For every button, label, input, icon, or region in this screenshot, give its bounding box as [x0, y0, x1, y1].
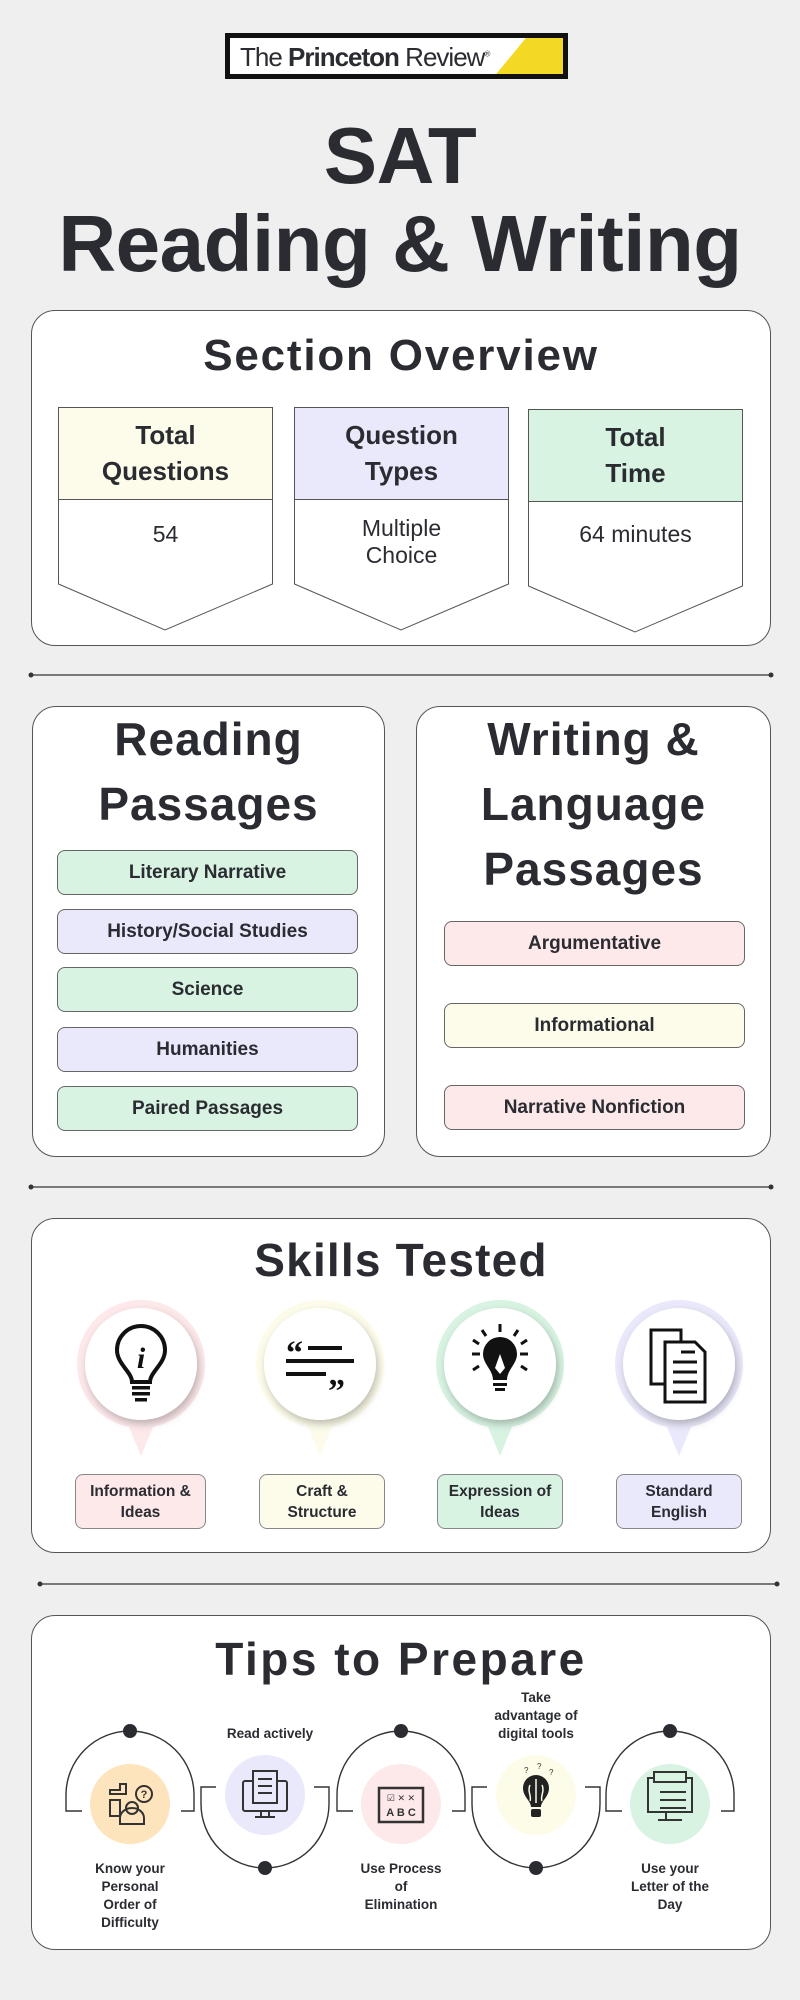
icon: abc board: A B C	[386, 1807, 416, 1819]
label: information & ideas	[75, 1474, 206, 1529]
heading: writing & language: Passages	[483, 843, 704, 895]
card: question types: Multiple	[362, 515, 441, 541]
icon: abc board	[361, 1764, 441, 1844]
icon: monitor document	[225, 1755, 305, 1835]
pill list: writing: Argumentative	[528, 932, 661, 954]
skill pins	[77, 1300, 743, 1456]
icon: brain bulb: ?	[549, 1768, 554, 1777]
tip label: personal order of difficulty: Difficulty	[101, 1915, 159, 1930]
pill list: reading	[57, 850, 358, 1131]
label: standard english: Standard	[645, 1482, 713, 1500]
icon: abc board: ☑ ✕ ✕	[387, 1793, 415, 1803]
card: total time	[528, 409, 743, 632]
label: standard english	[616, 1474, 742, 1529]
icon: brain bulb: ?	[524, 1766, 529, 1775]
icon: brain bulb: ?	[537, 1762, 542, 1771]
icon: puzzle person	[90, 1764, 170, 1844]
label: craft & structure: Craft &	[296, 1482, 348, 1500]
heading: writing & language: Writing &	[487, 713, 700, 765]
card: total questions: Questions	[102, 456, 229, 486]
heading: reading passages: Passages	[98, 778, 319, 830]
label: information & ideas: Information &	[90, 1482, 191, 1500]
pill list: reading: Science	[172, 978, 243, 1000]
heading: reading passages: Reading	[114, 713, 303, 765]
icon: letter of day monitor	[630, 1764, 710, 1844]
icon pin: information	[77, 1300, 205, 1456]
pill list: reading: History/Social Studies	[107, 920, 308, 942]
icon pin: standard english	[615, 1300, 743, 1456]
heading: section overview: Section Overview	[203, 331, 599, 380]
logo	[225, 33, 568, 79]
tip label: personal order of difficulty: Personal	[101, 1879, 159, 1894]
icon: brain bulb	[496, 1755, 576, 1835]
tip label: digital tools: digital tools	[498, 1726, 574, 1741]
tip label: process of elimination	[360, 1861, 442, 1912]
label: craft & structure	[259, 1474, 385, 1529]
label: standard english: English	[651, 1504, 707, 1520]
title: SAT	[324, 111, 476, 200]
title	[58, 111, 742, 288]
card: total time: 64 minutes	[579, 521, 692, 547]
tip label: process of elimination: of	[395, 1879, 407, 1894]
card: total questions: Total	[135, 420, 196, 450]
tip label: read actively: Read actively	[227, 1726, 313, 1741]
tip label: letter of the day: Letter of the	[631, 1879, 709, 1894]
icon pin: expression	[436, 1300, 564, 1456]
logo: The Princeton Review®	[240, 42, 489, 72]
tip label: personal order of difficulty: Know your	[95, 1861, 165, 1876]
card: total time: Total	[605, 422, 666, 452]
panel: tips to prepare	[31, 1615, 771, 1950]
tip label: personal order of difficulty	[95, 1861, 165, 1930]
pill list: writing: Narrative Nonfiction	[504, 1096, 685, 1118]
label: information & ideas: Ideas	[121, 1504, 160, 1520]
heading: reading passages	[98, 713, 319, 830]
panel: writing & language passages	[416, 706, 771, 1157]
tip label: process of elimination: Use Process	[360, 1861, 442, 1876]
label: craft & structure: Structure	[288, 1504, 356, 1520]
icon pin: craft	[256, 1300, 384, 1456]
heading: tips to prepare: Tips to Prepare	[215, 1633, 587, 1685]
label: expression of ideas: Ideas	[480, 1504, 520, 1520]
card: total questions: 54	[153, 521, 178, 547]
heading: writing & language: Language	[481, 778, 706, 830]
heading: skills tested: Skills Tested	[254, 1234, 548, 1286]
card: total questions	[58, 407, 273, 630]
panel: section overview	[31, 310, 771, 646]
tip label: letter of the day: Day	[658, 1897, 682, 1912]
tip label: digital tools: advantage of	[494, 1708, 578, 1723]
tip label: personal order of difficulty: Order of	[103, 1897, 157, 1912]
card: question types: Choice	[366, 542, 437, 568]
card: question types	[294, 407, 509, 630]
card: question types: Types	[365, 456, 438, 486]
tip label: letter of the day: Use your	[641, 1861, 699, 1876]
pill list: writing: Informational	[534, 1014, 655, 1036]
pill list: reading: Paired Passages	[132, 1098, 283, 1118]
card: total time: Time	[605, 458, 666, 488]
icon pin: craft: “	[286, 1335, 303, 1372]
tip label: process of elimination: Elimination	[365, 1897, 437, 1912]
card: question types: Question	[345, 420, 458, 450]
pill list: writing	[444, 921, 745, 1130]
panel: skills tested	[31, 1218, 771, 1553]
label: expression of ideas: Expression of	[449, 1482, 551, 1500]
pill list: reading: Humanities	[156, 1038, 259, 1060]
title: Reading & Writing	[58, 199, 742, 288]
tip label: digital tools: Take	[521, 1690, 551, 1705]
icon: puzzle person: ?	[141, 1789, 148, 1801]
pill list: reading: Literary Narrative	[129, 862, 286, 882]
tip label: letter of the day	[631, 1861, 709, 1912]
panel: reading passages	[32, 706, 385, 1157]
heading: writing & language	[481, 713, 706, 895]
icon pin: craft: ”	[328, 1373, 345, 1410]
label: expression of ideas	[437, 1474, 563, 1529]
icon pin: information: i	[137, 1342, 146, 1375]
tip label: digital tools	[494, 1690, 578, 1741]
